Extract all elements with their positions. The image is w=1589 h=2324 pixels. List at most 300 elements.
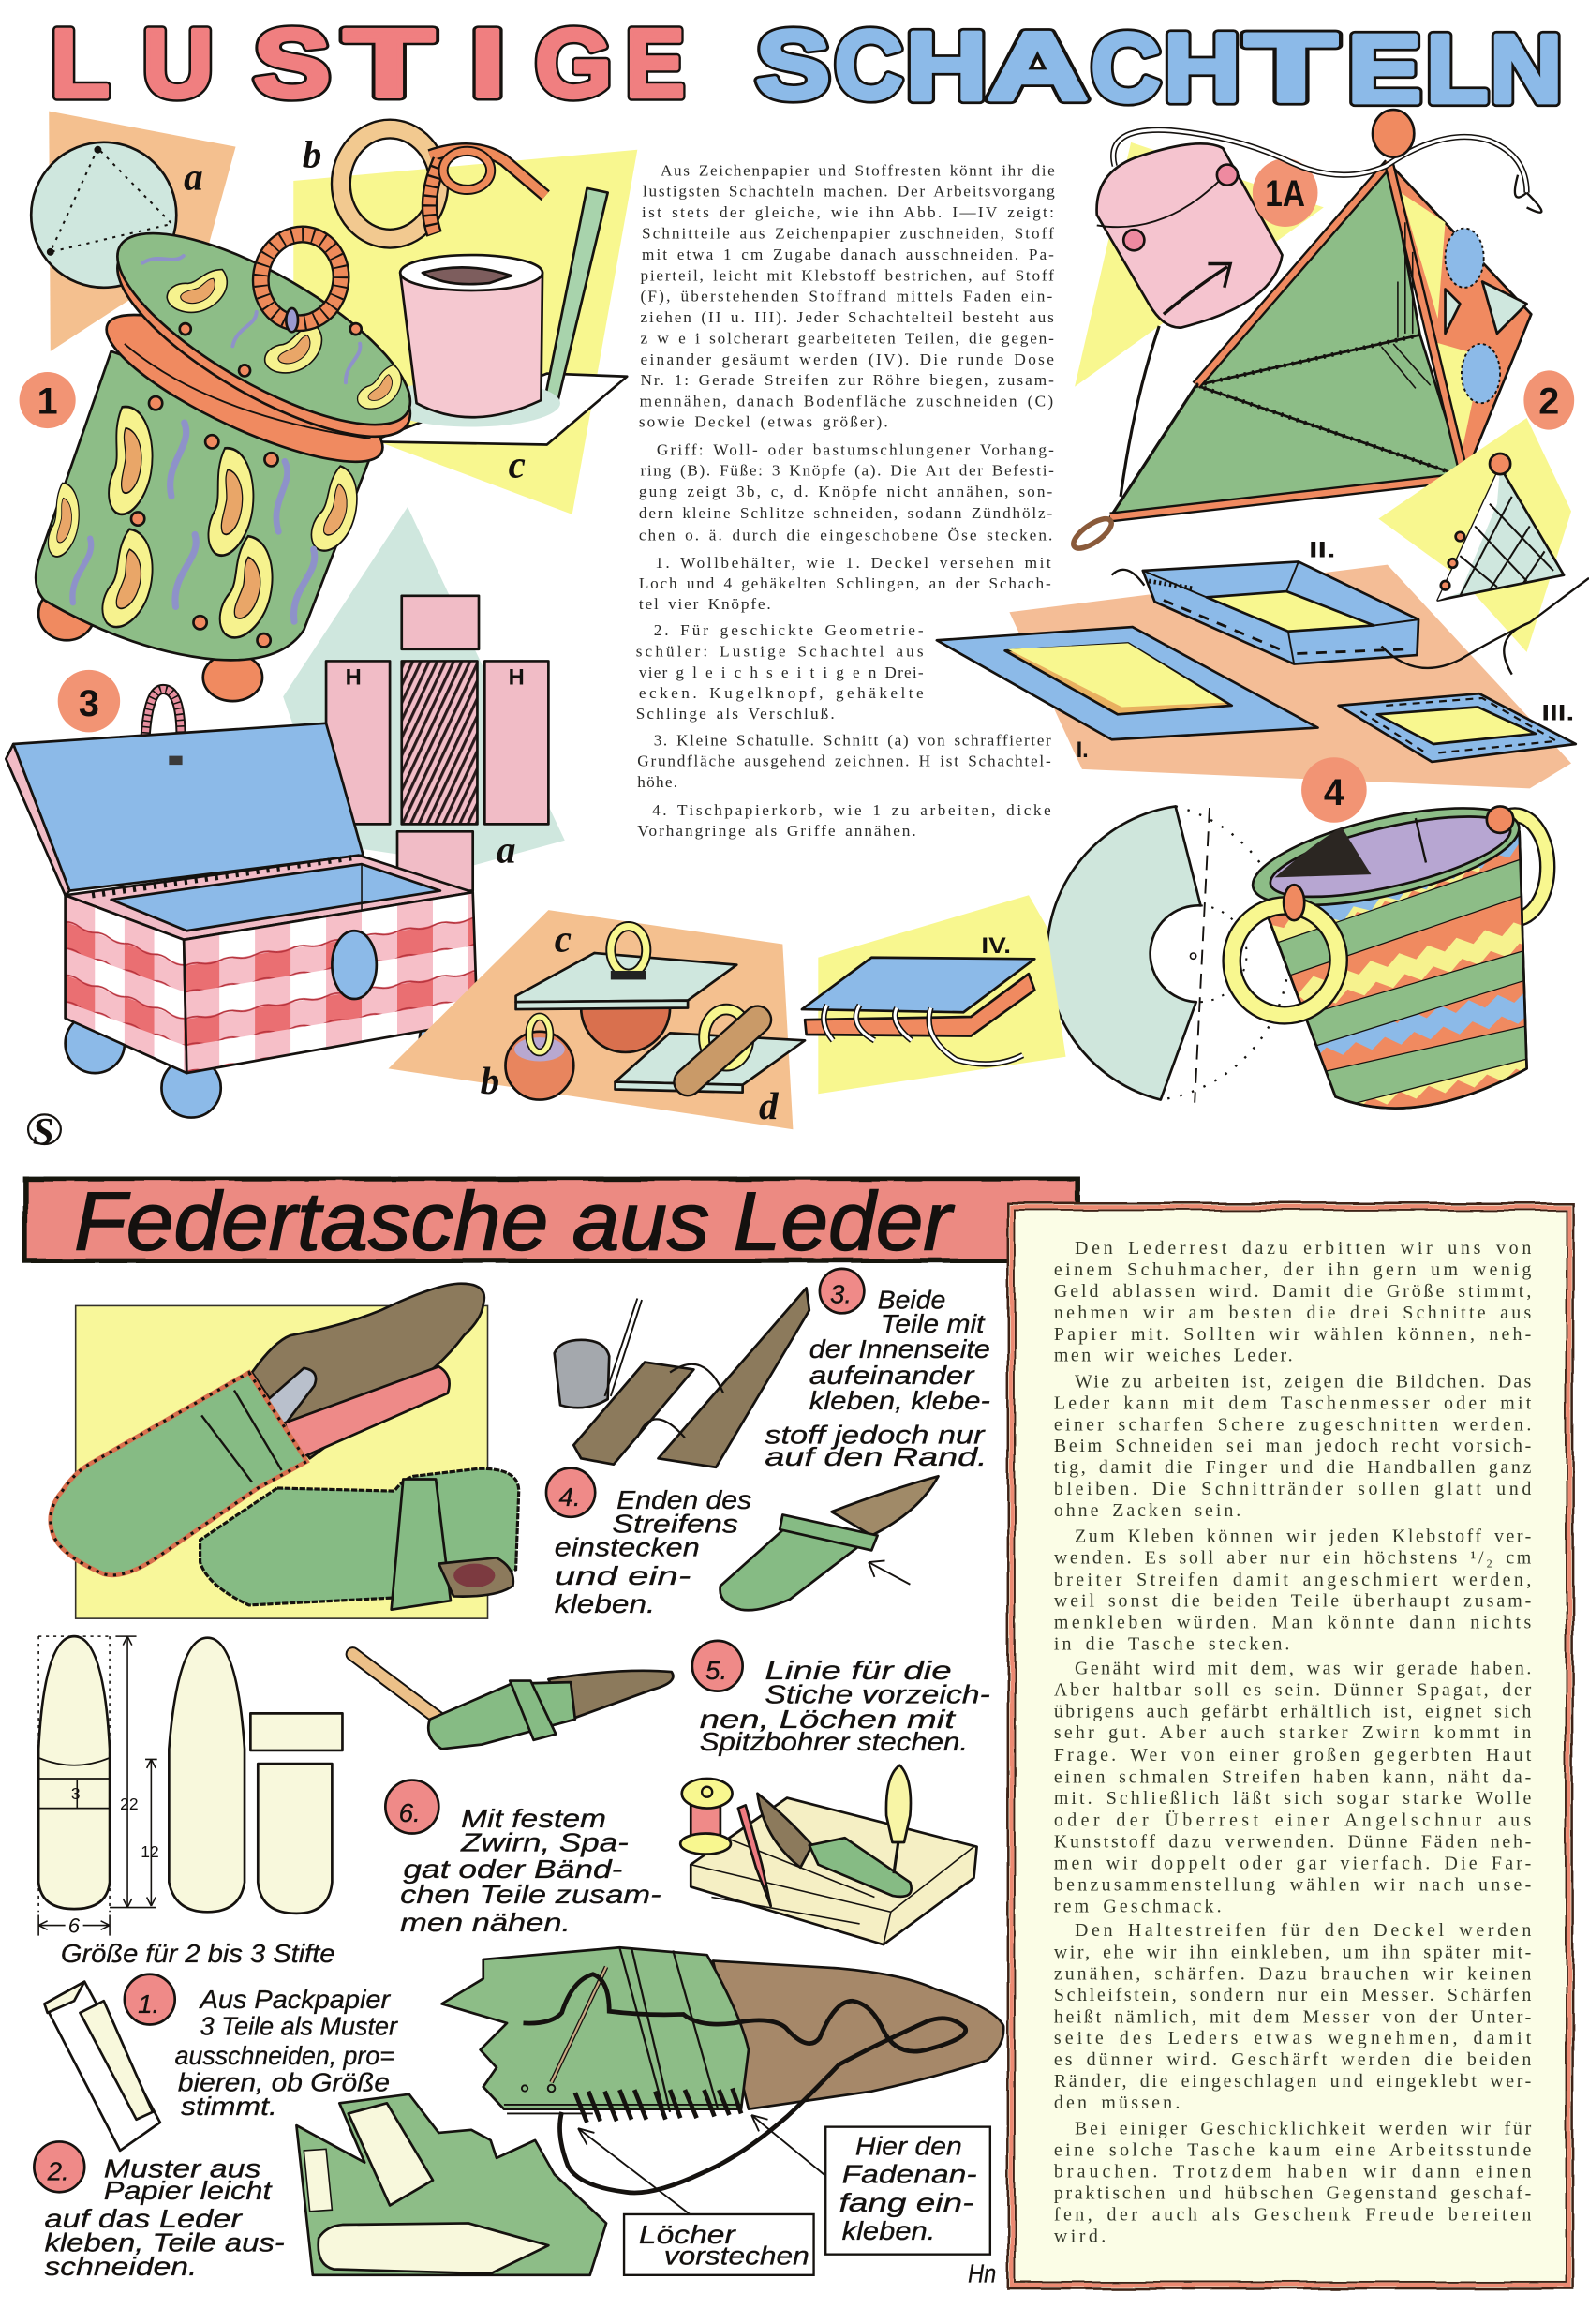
title word: Lustige: E <box>626 9 685 117</box>
needle colour <box>552 1967 606 2082</box>
illustration: fastening details b, c, d <box>389 910 805 1129</box>
article text: Lustige Schachteln: schüler: Lustige Schachtel aus <box>636 643 924 661</box>
upper blue part <box>802 958 1034 1012</box>
caption step 5: Linie für die <box>765 1656 952 1685</box>
number badge 2: 2. <box>47 2157 69 2186</box>
right ring <box>1482 815 1548 919</box>
title word: Lustige: T <box>344 9 435 117</box>
dimension values: 22 <box>120 1795 138 1813</box>
panel: Federtasche article text: men wir doppelt oder gar vierfach. Die Far- <box>1054 1853 1531 1873</box>
panel: Federtasche article text: tig, damit die Finger und die Handballen ganz <box>1054 1457 1531 1478</box>
panel: Federtasche article text: Ränder, die eingeschlagen und eingeklebt wer- <box>1054 2071 1531 2092</box>
thread <box>523 1974 966 2193</box>
panel: Federtasche article text: Geld ablassen wird. Damit die Größe stimmt, <box>1054 1281 1531 1302</box>
caption step 6: Mit festem <box>461 1804 606 1833</box>
title word: Lustige: G <box>535 9 612 117</box>
panel: Federtasche article text: rem Geschmack. <box>1054 1896 1222 1916</box>
step 4: insert strap ends <box>546 1468 938 1618</box>
article text: Lustige Schachteln: dern kleine Schlitze schneiden, sodann Zündhölz- <box>639 504 1053 522</box>
panel: Federtasche article text: fen, der auch als Geschenk Freude bereiten <box>1054 2204 1531 2225</box>
rope loop <box>145 689 181 738</box>
dimension values: 6 <box>68 1914 81 1937</box>
title word: Schachteln: C <box>1091 14 1161 122</box>
background shape: yellow <box>293 150 637 514</box>
feet <box>38 587 262 701</box>
panel: Federtasche article text: benzusammenstellung wählen wir nach unse- <box>1054 1875 1531 1896</box>
panel: Federtasche article text: Schleifstein, sondern nur ein Messer. Schärfen <box>1054 1985 1531 2005</box>
caption step 4: Streifens <box>612 1509 738 1538</box>
labels I II III: II. <box>1309 539 1335 563</box>
step 1: cut paper patterns <box>44 1974 399 2151</box>
background yellow square <box>76 1305 488 1618</box>
title word: Lustige: I <box>470 9 505 117</box>
article text: Lustige Schachteln: (F), überstehenden Stoffrand mittels Faden ein- <box>640 288 1053 305</box>
pyramid green faces <box>1110 163 1464 517</box>
panel: Federtasche article text: Genäht wird mit dem, was wir gerade haben. <box>1075 1658 1531 1678</box>
title word: Schachteln: C <box>1091 14 1161 122</box>
number badge 6: 6. <box>399 1798 421 1827</box>
article text: Lustige Schachteln: gung zeigt 3b, c, d. Knöpfe nicht annähen, son- <box>639 483 1053 500</box>
caption step 4: einstecken <box>555 1533 700 1562</box>
basket body <box>1268 830 1528 1110</box>
pattern right H: H <box>509 666 525 691</box>
panel: Federtasche article text: mit. Schließlich läßt sich sogar starke Wolle <box>1054 1788 1531 1809</box>
panel: Federtasche article text: sehr gut. Aber auch starker Zwirn kommt in <box>1054 1722 1531 1743</box>
number badge 1: 1. <box>138 1989 159 2019</box>
article text: Lustige Schachteln: 4. Tischpapierkorb, wie 1 zu arbeiten, dicke <box>652 801 1051 819</box>
article text: Lustige Schachteln: pierteil, leicht mit Klebstoff bestrichen, auf Stoff <box>640 266 1054 284</box>
panel: Federtasche article text: Beim Schneiden sei man jedoch recht vorsich- <box>1054 1436 1531 1456</box>
caption step 3: aufeinander <box>809 1361 976 1390</box>
caption step 1: 3 Teile als Muster <box>200 2012 399 2041</box>
title word: Lustige: T <box>344 9 435 117</box>
panel: Federtasche article text: men wir weiches Leder. <box>1054 1346 1293 1366</box>
title word: Schachteln: A <box>988 12 1088 120</box>
plate c with button <box>516 927 736 1052</box>
labels I II III <box>1077 539 1574 763</box>
article text: Lustige Schachteln: einander gesäumt werden (IV). Die runde Dose <box>640 350 1054 368</box>
title word: Schachteln: E <box>1347 15 1421 123</box>
title word: Schachteln: H <box>1164 14 1240 122</box>
caption step 6: men nähen. <box>400 1908 571 1937</box>
letter b: b <box>303 133 321 176</box>
article text: Lustige Schachteln: 3. Kleine Schatulle. Schnitt (a) von schraffierter <box>654 732 1051 750</box>
leather piece left <box>573 1363 693 1465</box>
body paisley pattern <box>48 396 362 647</box>
pattern right H <box>484 661 548 824</box>
illustration: steps I, II, III <box>937 539 1589 788</box>
title: Lustige Schachteln <box>51 9 1563 123</box>
title word: Lustige: E <box>626 9 685 117</box>
caption step 2 <box>44 2153 285 2281</box>
step 5: mark the stitches <box>353 1641 990 1756</box>
title word: Schachteln <box>756 10 1563 123</box>
labels I II III: III. <box>1541 702 1574 726</box>
article text: Lustige Schachteln: 2. Für geschickte Geometrie- <box>654 621 924 639</box>
article text: Lustige Schachteln: Grundfläche ausgehend zeichnen. H ist Schachtel- <box>637 752 1051 770</box>
panel: Federtasche article text <box>1008 1203 1573 2288</box>
brown leather <box>713 1960 1003 2109</box>
caption step 3: kleben, klebe- <box>809 1386 990 1415</box>
green open pouch <box>51 1373 306 1575</box>
caption step 3: der Innenseite <box>809 1334 990 1363</box>
large sewing illustration <box>441 1947 1003 2288</box>
panel: Federtasche article text: wir, ehe wir ihn einkleben, um ihn später mit- <box>1054 1942 1531 1962</box>
lower orange part <box>805 974 1034 1036</box>
step 2: glue on leather and cut <box>34 2094 606 2281</box>
letter c: c <box>509 442 526 485</box>
caption: size note: Größe für 2 bis 3 Stifte <box>61 1939 335 1968</box>
pattern bottom flap <box>397 831 473 891</box>
number badge 4 <box>546 1468 595 1517</box>
panel: Federtasche article text: Frage. Wer von einer großen gegerbten Haut <box>1054 1745 1532 1765</box>
background shape: orange <box>1009 565 1571 788</box>
title word: Schachteln: S <box>756 10 830 118</box>
number badge 4 <box>1301 757 1367 823</box>
callout: Fadenanfang: fang ein- <box>839 2188 973 2217</box>
brown back flap <box>252 1284 484 1458</box>
article text: Lustige Schachteln: höhe. <box>637 773 677 791</box>
labels I II III: I. <box>1077 738 1089 763</box>
panel: Federtasche article text: menkleben würden. Man könnte dann nichts <box>1054 1613 1532 1633</box>
dimension lines <box>38 1636 157 1936</box>
basket rim and interior <box>1244 788 1527 925</box>
article text: Lustige Schachteln: sowie Deckel (etwas größer). <box>639 413 888 431</box>
brush <box>604 1299 642 1396</box>
title word: Lustige: U <box>142 9 214 117</box>
orange rim <box>91 289 398 488</box>
caption step 4: und ein- <box>555 1561 691 1590</box>
title word: Schachteln: C <box>835 10 902 118</box>
caption step 2: auf das Leder <box>44 2204 244 2233</box>
panel: Federtasche article text: bleiben. Die Schnittränder sollen glatt und <box>1054 1479 1531 1499</box>
caption step 6: gat oder Bänd- <box>403 1855 622 1884</box>
article text: Lustige Schachteln: z w e i solcherart gearbeiteten Teilen, die gegen- <box>640 329 1054 347</box>
article text: Lustige Schachteln: Loch und 4 gehäkelten Schlingen, an der Schach- <box>639 574 1051 592</box>
panel: Federtasche article text: Zum Kleben können wir jeden Klebstoff ver- <box>1075 1526 1531 1546</box>
caption step 5: Stiche vorzeich- <box>765 1679 990 1708</box>
number badge 3: 3 <box>79 683 99 724</box>
glue pot <box>555 1340 609 1408</box>
pattern piece 3 <box>258 1764 332 1914</box>
caption step 3: auf den Rand. <box>765 1442 988 1471</box>
pouch with brown tip <box>720 1476 938 1610</box>
panel: Federtasche article text: Bei einiger Geschicklichkeit werden wir für <box>1075 2119 1532 2139</box>
title word: Schachteln: H <box>1164 14 1240 122</box>
pink pen <box>285 1366 450 1460</box>
article text: Lustige Schachteln: mennähen, danach Bodenfläche zuschneiden (C) <box>640 392 1053 410</box>
spool <box>680 1779 733 1855</box>
caption step 3: stoff jedoch nur <box>765 1421 987 1450</box>
pyramid net flap with pattern <box>1389 163 1531 477</box>
title word: Lustige: L <box>51 9 110 117</box>
number badge 5: 5. <box>705 1656 727 1685</box>
rope loop colour <box>145 689 181 738</box>
title word: Schachteln: H <box>906 12 988 120</box>
title word: Schachteln: L <box>1426 15 1488 123</box>
background shape: yellow <box>1075 142 1324 387</box>
wooden block <box>691 1798 977 1944</box>
panel: Federtasche article text: Kunststoff dazu verwenden. Dünne Fäden neh- <box>1054 1832 1531 1853</box>
illustration: finished pen case <box>51 1284 519 1618</box>
panel: Federtasche article text: einem Schuhmacher, der ihn gern um wenig <box>1054 1259 1531 1280</box>
panel: Federtasche article text: einen schmalen Streifen haben kann, näht da- <box>1054 1766 1531 1787</box>
article text: Lustige Schachteln: chen o. ä. durch die eingeschobene Öse stecken. <box>639 527 1052 544</box>
callout: Fadenanfang: Hier den <box>855 2132 962 2161</box>
illustration: step IV sewing <box>802 895 1066 1094</box>
panel: Federtasche article text: brauchen. Trotzdem haben wir dann einen <box>1054 2161 1531 2182</box>
pattern: cone sector <box>1047 806 1289 1103</box>
caption step 1 <box>175 1985 399 2121</box>
folded paper <box>44 1982 160 2151</box>
panel: Federtasche article text: zunähen, schärfen. Dazu brauchen wir keinen <box>1054 1963 1531 1984</box>
caption step 1: stimmt. <box>181 2092 277 2121</box>
article text: Lustige Schachteln: Griff: Woll- oder bastumschlungener Vorhang- <box>657 441 1054 459</box>
panel: Federtasche article text: es dünner wird. Geschärft werden die beiden <box>1054 2049 1531 2070</box>
number badge 4: 4 <box>1324 772 1344 813</box>
title word: Lustige: S <box>254 9 331 117</box>
caption step 2: Muster aus <box>104 2153 261 2182</box>
title word: Lustige: U <box>142 9 214 117</box>
article text: Lustige Schachteln: Schnitteile aus Zeichenpapier zuschneiden, Stoff <box>642 225 1054 243</box>
button b <box>505 1017 573 1100</box>
pattern piece 1 <box>38 1636 110 1912</box>
casket lid <box>6 723 364 895</box>
cut patterns with dimensions <box>38 1636 342 1968</box>
article text: Lustige Schachteln: lustigsten Schachteln machen. Der Arbeitsvorgang <box>643 183 1055 201</box>
letter a: a <box>497 828 516 872</box>
panel: Federtasche article text: Aber haltbar soll es sein. Dünner Spagat, der <box>1054 1679 1532 1700</box>
callout: Fadenanfang: kleben. <box>842 2216 935 2245</box>
signature monogram <box>28 1110 61 1153</box>
callout: Fadenanfang <box>751 2115 990 2255</box>
panel: Federtasche article text: seite des Leders etwas wegnehmen, damit <box>1054 2028 1532 2048</box>
caption step 3: Beide <box>878 1286 945 1315</box>
panel: Federtasche article text: praktischen und hübschen Gegenstand geschaf- <box>1054 2183 1531 2204</box>
needle <box>552 1967 606 2082</box>
ball on top and cord <box>1113 110 1541 213</box>
caption step 2: kleben, Teile aus- <box>44 2228 285 2257</box>
pattern strap <box>250 1713 342 1750</box>
front button <box>332 931 377 999</box>
title word: Schachteln: T <box>1245 14 1337 122</box>
article text: Lustige Schachteln: tel vier Knöpfe. <box>639 595 771 613</box>
panel: Federtasche article text: wenden. Es soll aber nur ein höchstens ¹/₂ cm <box>1054 1548 1532 1569</box>
title word: Lustige: I <box>470 9 505 117</box>
panel: Federtasche article text: einer scharfen Schere zugeschnitten werden. <box>1054 1414 1531 1435</box>
left ring handle <box>1223 885 1347 1023</box>
plate d with stick <box>616 1009 805 1093</box>
caption step 6: chen Teile zusam- <box>400 1880 661 1909</box>
panel: Federtasche article text: übrigens auch gefärbt erhältlich ist, eignet sich <box>1054 1702 1531 1722</box>
number badge 2 <box>34 2141 84 2192</box>
brown and green pouch <box>757 1794 912 1897</box>
background shape: yellow for item 2 <box>1378 418 1571 652</box>
leather sheet with patterns <box>296 2094 606 2275</box>
panel: Federtasche article text: Leder kann mit dem Taschenmesser oder mit <box>1054 1393 1532 1413</box>
callout: Löcher vorstechen <box>578 2128 814 2275</box>
article text: Lustige Schachteln: 1. Wollbehälter, wie 1. Deckel versehen mit <box>655 554 1051 572</box>
article text: Lustige Schachteln: Aus Zeichenpapier und Stoffresten könnt ihr die <box>661 161 1055 179</box>
pink cylinder 1A <box>1097 143 1283 328</box>
caption step 5 <box>700 1656 990 1756</box>
thread and loop <box>1069 326 1159 554</box>
number badge 5 <box>692 1641 743 1691</box>
cut pattern circle a <box>31 142 176 288</box>
number badge 1 <box>20 372 76 428</box>
pencil <box>353 1654 459 1735</box>
title word: Schachteln: S <box>756 10 830 118</box>
letters b c d <box>481 916 780 1127</box>
background shape: yellow <box>818 895 1066 1094</box>
number badge 2: 2 <box>1538 380 1559 422</box>
awl <box>886 1765 911 1873</box>
title word: Lustige <box>51 9 685 117</box>
number badge 3: 3. <box>830 1279 852 1308</box>
step 3: glue parts together <box>555 1269 990 1471</box>
leather piece right <box>658 1288 809 1467</box>
grey blade <box>267 1368 316 1435</box>
background shape: orange <box>389 910 793 1129</box>
green leather <box>441 1947 749 2109</box>
number badge 3 <box>58 670 120 732</box>
pencil colour <box>353 1654 459 1735</box>
article text: Lustige Schachteln: ring (B). Füße: 3 Knöpfe (a). Die Art der Befesti- <box>640 462 1054 480</box>
title word: Lustige: G <box>535 9 612 117</box>
pattern piece 2 <box>169 1638 245 1912</box>
lid <box>93 199 435 471</box>
callout: Löcher vorstechen: vorstechen <box>664 2242 809 2271</box>
pattern left H: H <box>346 666 362 691</box>
caption step 4: Enden des <box>616 1485 751 1514</box>
stitches and holes <box>504 2085 741 2123</box>
panel: Federtasche article text: Den Haltestreifen für den Deckel werden <box>1075 1920 1531 1941</box>
ring b with rope <box>341 129 545 239</box>
right ring fill <box>1482 815 1548 919</box>
caption step 2: Papier leicht <box>104 2176 273 2205</box>
article text: Lustige Schachteln: vier g l e i c h s e i t i g e n Drei- <box>639 663 924 681</box>
green closed pouch <box>200 1468 519 1610</box>
dimension values: 12 <box>141 1842 159 1861</box>
illustration: 4 wastepaper basket <box>1047 757 1559 1134</box>
number badge 1: 1 <box>37 380 58 422</box>
casket left face <box>66 895 186 1073</box>
number badge 2 <box>1523 370 1574 430</box>
caption step 3 <box>765 1286 990 1471</box>
casket right face <box>184 892 477 1073</box>
panel: Federtasche article text: Wie zu arbeiten ist, zeigen die Bildchen. Das <box>1075 1371 1532 1392</box>
title word: Schachteln: E <box>1347 15 1421 123</box>
plaid triangle box 2 <box>1438 454 1564 601</box>
caption step 1: bieren, ob Größe <box>178 2068 390 2097</box>
heading banner: Federtasche aus Leder: Federtasche aus Leder <box>74 1174 955 1267</box>
illustration: 1A wool box and 2 pyramid <box>1069 110 1574 652</box>
caption step 2: schneiden. <box>44 2252 197 2281</box>
title word: Schachteln: A <box>988 12 1088 120</box>
letters b c d: d <box>759 1084 780 1127</box>
signature: Hn <box>968 2259 996 2288</box>
title word: Schachteln: N <box>1490 15 1563 123</box>
title word: Lustige: L <box>51 9 110 117</box>
number badge 3 <box>820 1269 864 1313</box>
letters b c d: c <box>555 916 572 960</box>
green tin body <box>36 351 375 660</box>
panel: Federtasche article text: heißt nämlich, mit dem Messer von der Unter- <box>1054 2006 1531 2027</box>
caption step 5: Spitzbohrer stechen. <box>700 1727 968 1756</box>
caption step 6: Zwirn, Spa- <box>460 1827 629 1856</box>
number badge 1 <box>125 1974 175 2025</box>
panel: Federtasche article text: Papier mit. Sollten wir wählen können, neh- <box>1054 1324 1531 1345</box>
title word: Lustige: S <box>254 9 331 117</box>
title word: Schachteln: H <box>906 12 988 120</box>
panel: Federtasche article text: nehmen wir am besten die drei Schnitte aus <box>1054 1303 1532 1323</box>
pattern piece 1: 3 <box>71 1784 81 1803</box>
pink cylinder <box>382 255 560 427</box>
caption step 5: nen, Löchen mit <box>700 1705 957 1734</box>
caption step 1: Aus Packpapier <box>198 1985 392 2014</box>
needle and thread <box>1112 570 1589 675</box>
caption step 6 <box>400 1804 661 1937</box>
background shape: pale green <box>283 507 565 866</box>
number badge 6 <box>385 1780 438 1833</box>
panel: Federtasche article text: eine solche Tasche kaum eine Arbeitsstunde <box>1054 2140 1531 2161</box>
strap lines <box>619 1947 718 2112</box>
panel: Federtasche article text: ohne Zacken sein. <box>1054 1500 1240 1521</box>
letter a: a <box>184 155 203 198</box>
panel: Federtasche article text: breiter Streifen damit angeschmiert werden, <box>1054 1570 1531 1590</box>
panel: Federtasche article text: oder der Überrest einer Angelschnur aus <box>1054 1810 1532 1831</box>
caption step 1: ausschneiden, pro= <box>175 2041 394 2070</box>
step III frame <box>1339 693 1576 762</box>
number badge 1A: 1A <box>1265 173 1305 215</box>
article text: Lustige Schachteln: Nr. 1: Gerade Streifen zur Röhre biegen, zusam- <box>640 371 1054 389</box>
panel: Federtasche article text: in die Tasche stecken. <box>1054 1633 1289 1654</box>
small knife <box>738 1805 771 1906</box>
article text: Lustige Schachteln: ist stets der gleiche, wie ihn Abb. I—IV zeigt: <box>642 203 1054 221</box>
step I blue cloth with yellow card <box>937 627 1317 739</box>
article text: Lustige Schachteln: Vorhangringe als Griffe annähen. <box>637 822 916 840</box>
number badge 4: 4. <box>558 1482 581 1512</box>
article text: Lustige Schachteln: ziehen (II u. III). Jeder Schachtelteil besteht aus <box>640 308 1054 326</box>
number badge 1A <box>1253 158 1317 227</box>
label IV: IV. <box>981 934 1011 959</box>
caption step 4 <box>555 1485 751 1618</box>
pouch <box>428 1671 673 1749</box>
white paper c <box>371 374 627 444</box>
background shape: orange <box>49 112 236 351</box>
illustration: 3 casket pattern <box>6 507 565 1153</box>
article text: Lustige Schachteln: ecken. Kugelknopf, gehäkelte <box>639 684 924 702</box>
curved arrows <box>637 1364 723 1438</box>
signature monogram: S <box>33 1110 54 1153</box>
casket interior and rim <box>66 856 473 940</box>
step II folded box <box>1143 561 1418 664</box>
title word: Schachteln: L <box>1426 15 1488 123</box>
panel: Federtasche article text: den müssen. <box>1054 2093 1180 2113</box>
title word: Schachteln: T <box>1245 14 1337 122</box>
title word: Schachteln: C <box>835 10 902 118</box>
panel: Federtasche article text: Den Lederrest dazu erbitten wir uns von <box>1075 1238 1531 1259</box>
feet of casket <box>66 1012 476 1118</box>
caption step 3: Teile mit <box>881 1309 986 1338</box>
panel: Federtasche article text: weil sonst die beiden Teile überhaupt zusam- <box>1054 1590 1531 1611</box>
article text: Lustige Schachteln: Schlinge als Verschluß. <box>636 705 835 723</box>
callout: Löcher vorstechen: Löcher <box>639 2220 737 2249</box>
title word: Schachteln: N <box>1490 15 1563 123</box>
illustration: box 1 round tin <box>20 112 637 701</box>
letters b c d: b <box>481 1059 499 1102</box>
pencil <box>544 188 608 403</box>
